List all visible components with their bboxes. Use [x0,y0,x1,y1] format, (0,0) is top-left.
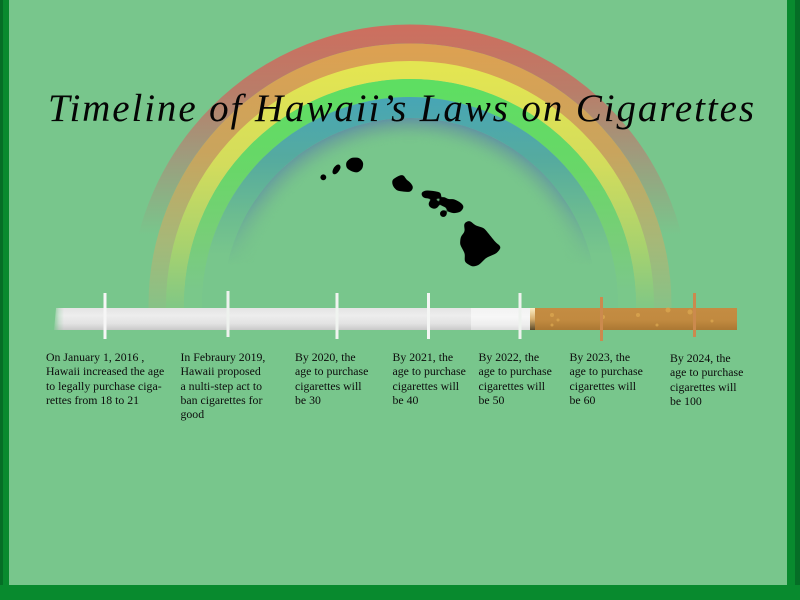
text: 2019 proposal: ban cigarettes for [180,393,262,407]
filter speckles [550,308,714,326]
text: 2024: By 2024, the [670,351,731,365]
text: 2016 law: rettes from 18 to 21 [46,393,139,407]
text: 2020 [295,350,368,407]
text: 2022: be 50 [478,393,504,407]
title: Timeline of Hawaii’s Laws on Cigarettes [48,87,754,130]
text: 2022: By 2022, the [478,350,539,364]
text: 2023 [570,350,643,407]
island: Kahoolawe [441,211,446,216]
text: 2019 proposal: In Febraury 2019, [180,350,265,364]
text: 2021 [392,350,466,407]
text: 2024: age to purchase [670,365,743,379]
cigarette filter [533,308,737,330]
text: 2020: be 30 [295,393,321,407]
text: 2021: By 2021, the [392,350,453,364]
text: 2020: age to purchase [295,364,368,378]
island: Oahu [393,176,412,191]
text: 2016 law: Hawaii increased the age [46,364,164,378]
text: 2020: By 2020, the [295,350,356,364]
text: 2023: cigarettes will [570,379,636,393]
text: 2021: cigarettes will [392,379,459,393]
island: Hawaii Big Island [461,222,500,265]
text: 2016 law: On January 1, 2016 , [46,350,144,364]
text: 2019 proposal: Hawaii proposed [180,364,261,378]
text: 2023: be 60 [570,393,595,407]
island: Lanai [430,201,438,208]
text: 2022: age to purchase [478,364,552,378]
text: 2021: age to purchase [392,364,466,378]
text: 2016 law [46,350,164,407]
island: Molokai [422,192,440,197]
text: 2024: cigarettes will [670,380,736,394]
rainbow [143,24,676,308]
island: Kauai [347,159,362,171]
island: Kauai west [333,165,340,174]
text: 2022 [478,350,552,407]
text: 2024 [670,351,743,408]
cigarette junction [530,308,535,330]
island: Niihau [321,175,325,179]
cigarette [54,308,737,330]
text: 2022: cigarettes will [478,379,545,393]
text: 2016 law: to legally purchase ciga- [46,379,162,393]
text: 2023: By 2023, the [570,350,630,364]
text: 2020: cigarettes will [295,379,362,393]
map: Hawaiian islands [321,159,500,265]
timeline ticks [104,291,696,341]
island: Maui [441,198,463,212]
text: 2019 proposal: good [180,407,204,421]
cigarette white section [471,308,533,330]
cigarette paper [54,308,472,330]
text: 2021: be 40 [392,393,418,407]
text: 2019 proposal: a nulti-step act to [180,379,262,393]
text: 2023: age to purchase [570,364,643,378]
text: 2019 proposal [180,350,265,421]
text: 2024: be 100 [670,394,702,408]
